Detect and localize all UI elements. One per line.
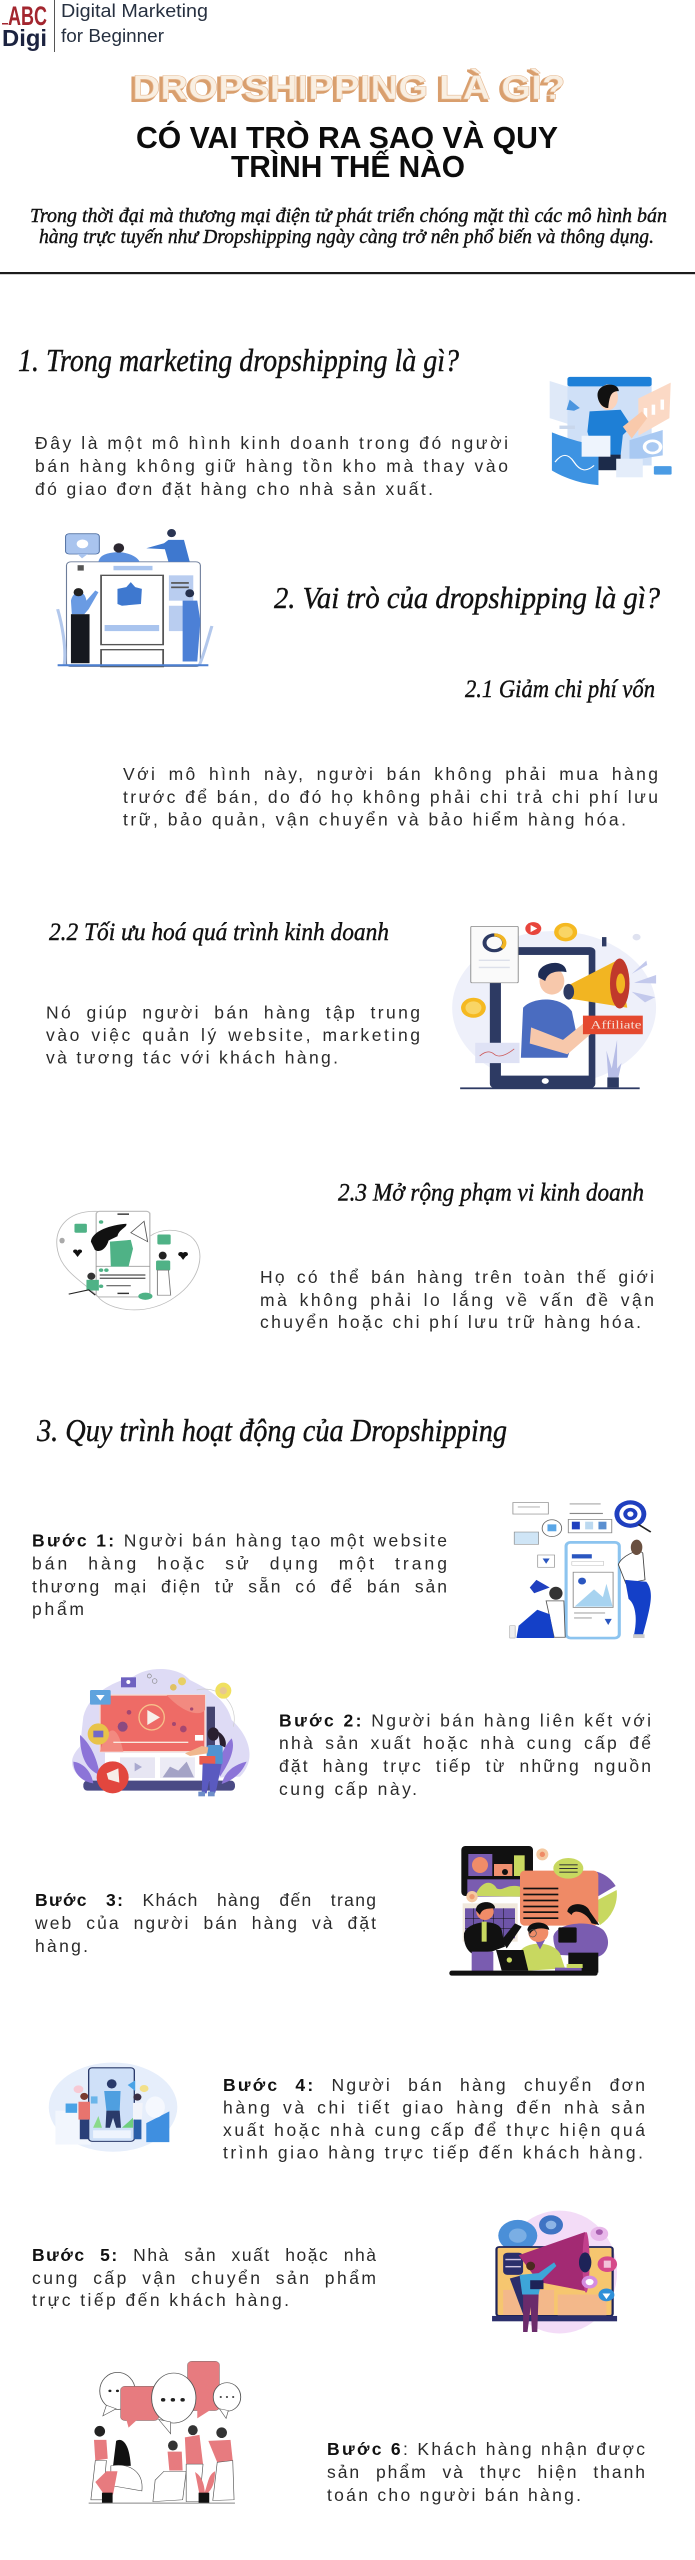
step 2 text: cung cấp này. (279, 1779, 417, 1799)
subtitle: CÓ VAI TRÒ RA SAO VÀ QUY (136, 119, 558, 155)
logo: ABC Digi: ABC (8, 1, 47, 31)
text 2.2 (46, 1003, 420, 1068)
step 2 text: Bước 2: Người bán hàng liên kết với (279, 1710, 651, 1730)
step 4 text: trình giao hàng trực tiếp đến khách hàng. (223, 2143, 643, 2163)
heading 2: 2. Vai trò của dropshipping là gì? (274, 580, 660, 615)
step 3 text: web của người bán hàng và đặt (34, 1913, 376, 1933)
step 6 text: toán cho người bán hàng. (327, 2485, 581, 2505)
text 2.1: Với mô hình này, người bán không phải mua hàng (123, 764, 658, 784)
step 1 text: bán hàng hoặc sử dụng một trang (32, 1554, 447, 1574)
intro text: hàng trực tuyến như Dropshipping ngày càng trở nên phổ biến và thông dụng. (39, 226, 654, 248)
text 2.2: Nó giúp người bán hàng tập trung (46, 1003, 420, 1023)
step 5 text (32, 2245, 376, 2310)
step 6 text: sản phẩm và thực hiện thanh (327, 2462, 645, 2482)
step 2 illustration: video screen (72, 1669, 250, 1796)
step 5 text: trực tiếp đến khách hàng. (32, 2290, 289, 2310)
icon: phone with marketing people (510, 1500, 651, 1638)
logo: ABC Digi: Digital Marketing (61, 1, 208, 21)
title: Dropshipping là gì: DROPSHIPPING LÀ GÌ? (132, 69, 566, 107)
text: definition: đó giao đơn đặt hàng cho nhà sản xuất. (35, 479, 433, 499)
step 1 text: phẩm (32, 1599, 84, 1619)
text 2.1 (123, 764, 658, 830)
step 3 illustration: team meeting (449, 1846, 617, 1976)
icon: social post with people (58, 529, 212, 667)
heading 2.3: 2.3 Mở rộng phạm vi kinh doanh (338, 1180, 644, 1207)
step 5 illustration: laptop with megaphone (492, 2211, 617, 2333)
step 5 text: Bước 5: Nhà sản xuất hoặc nhà (32, 2245, 376, 2265)
step 3 text (34, 1890, 376, 1956)
step 1 text (32, 1531, 447, 1619)
step 6 illustration: people talking (89, 2361, 241, 2504)
step 2 text (279, 1710, 651, 1799)
text 2.2: và tương tác với khách hàng. (46, 1048, 338, 1068)
text 2.3: mà không phải lo lắng về vấn đề vận (260, 1289, 654, 1310)
text 2.1: trước để bán, do đó họ không phải chi trả chi phí lưu (123, 787, 658, 807)
step 5 text: cung cấp vận chuyển sản phẩm (32, 2268, 376, 2288)
title: Dropshipping là gì: DROPSHIPPING LÀ GÌ? (130, 71, 563, 109)
logo: ABC Digi: for Beginner (61, 26, 164, 46)
text: definition: bán hàng không giữ hàng tồn kho mà thay vào (35, 456, 508, 476)
step 1 text: thương mại điện tử sẵn có để bán sản (32, 1576, 447, 1596)
step 2 text: đặt hàng trực tiếp từ những nguồn (279, 1756, 651, 1776)
subtitle: TRÌNH THẾ NÀO (231, 149, 465, 184)
icon: megaphone man on tablet (452, 922, 656, 1089)
subtitle (136, 119, 558, 184)
logo: ABC Digi (2, 0, 208, 52)
intro text (30, 205, 667, 248)
text 2.3: chuyển hoặc chi phí lưu trữ hàng hóa. (260, 1312, 641, 1332)
text 2.3 (260, 1267, 654, 1332)
step 1 text: Bước 1: Người bán hàng tạo một website (32, 1531, 447, 1551)
step 2 text: nhà sản xuất hoặc nhà cung cấp để (279, 1733, 651, 1753)
step 6 text (327, 2439, 645, 2505)
intro text: Trong thời đại mà thương mại điện tử phát triển chóng mặt thì các mô hình bán (30, 205, 667, 227)
step 3 text: hàng. (35, 1936, 88, 1956)
text: definition: Đây là một mô hình kinh doanh trong đó người (35, 433, 508, 453)
step 6 text: Bước 6: Khách hàng nhận được (327, 2439, 645, 2459)
icon: man with dashboards (550, 377, 672, 485)
heading 1: 1. Trong marketing dropshipping là gì? (18, 342, 459, 378)
logo: ABC Digi: Digi (2, 25, 47, 51)
step 4 text: hàng và chi tiết giao hàng đến nhà sản (223, 2098, 645, 2118)
text: definition (35, 433, 508, 499)
heading 3: 3. Quy trình hoạt động của Dropshipping (36, 1412, 507, 1448)
step 4 text: xuất hoặc nhà cung cấp để thực hiện quá (223, 2120, 645, 2140)
step 4 illustration: phone and team (49, 2062, 177, 2152)
text 2.1: trữ, bảo quản, vận chuyển và bảo hiểm hàng hóa. (123, 810, 626, 830)
step 4 text (223, 2075, 645, 2163)
icon: megaphone man on tablet: Affiliate (590, 1019, 642, 1031)
heading 2.1: 2.1 Giảm chi phí vốn (465, 676, 655, 703)
step 4 text: Bước 4: Người bán hàng chuyển đơn (223, 2075, 645, 2095)
text 2.3: Họ có thể bán hàng trên toàn thế giới (260, 1267, 654, 1287)
step 3 text: Bước 3: Khách hàng đến trang (35, 1890, 376, 1910)
heading 2.2: 2.2 Tối ưu hoá quá trình kinh doanh (49, 919, 389, 946)
text 2.2: vào việc quản lý website, marketing (46, 1025, 420, 1045)
icon: woman with megaphone on phone (57, 1211, 200, 1310)
